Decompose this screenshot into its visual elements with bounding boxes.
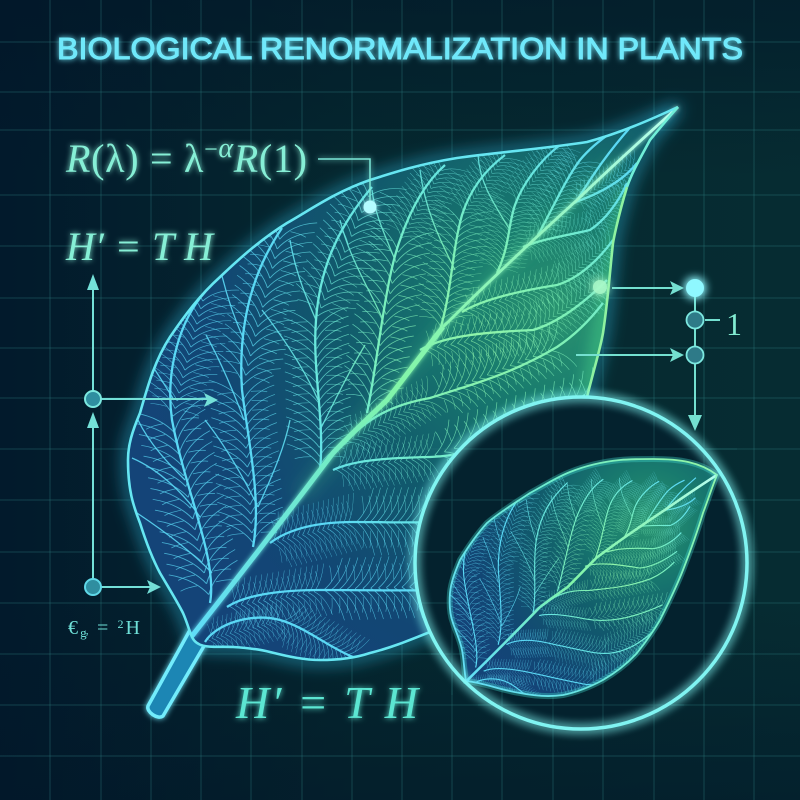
equation: bottom: H′ = T H	[235, 677, 421, 728]
equation: scaling law: (1)	[259, 136, 307, 181]
leaf veins	[132, 129, 636, 659]
small equation: =	[90, 617, 115, 639]
small equation: €	[68, 617, 78, 639]
node: lower axis point	[85, 579, 101, 595]
equation: scaling law: α	[218, 133, 234, 164]
equation: transform H: H′ = T H	[65, 224, 215, 269]
equation: scaling law	[65, 133, 307, 181]
main leaf	[100, 90, 720, 717]
node: top bright	[686, 279, 704, 297]
node: upper axis point	[85, 391, 101, 407]
equation: scaling law: R	[233, 136, 258, 181]
node: middle	[686, 312, 704, 328]
small leaf	[446, 456, 720, 700]
right axis with arrows	[576, 279, 742, 431]
leaf stem	[148, 630, 204, 717]
left axis with arrows	[85, 274, 218, 595]
leaf blade	[128, 107, 678, 660]
midrib	[192, 107, 678, 636]
circle ring	[415, 397, 747, 729]
small equation: ᶃ	[80, 625, 88, 640]
small equation: 2	[117, 617, 123, 631]
callout line to leaf point	[318, 159, 376, 214]
leaf outline	[128, 107, 678, 660]
small equation: H	[126, 617, 140, 639]
title: BIOLOGICAL RENORMALIZATION IN PLANTS	[57, 32, 743, 66]
magnifier circle with small leaf	[415, 397, 747, 761]
node: leaf sample point	[593, 280, 607, 294]
equation: scaling law: −	[204, 137, 218, 163]
node: lower	[686, 346, 704, 364]
equation: scaling law: R(λ) = λ	[66, 136, 203, 181]
label: 1: 1	[726, 306, 742, 342]
